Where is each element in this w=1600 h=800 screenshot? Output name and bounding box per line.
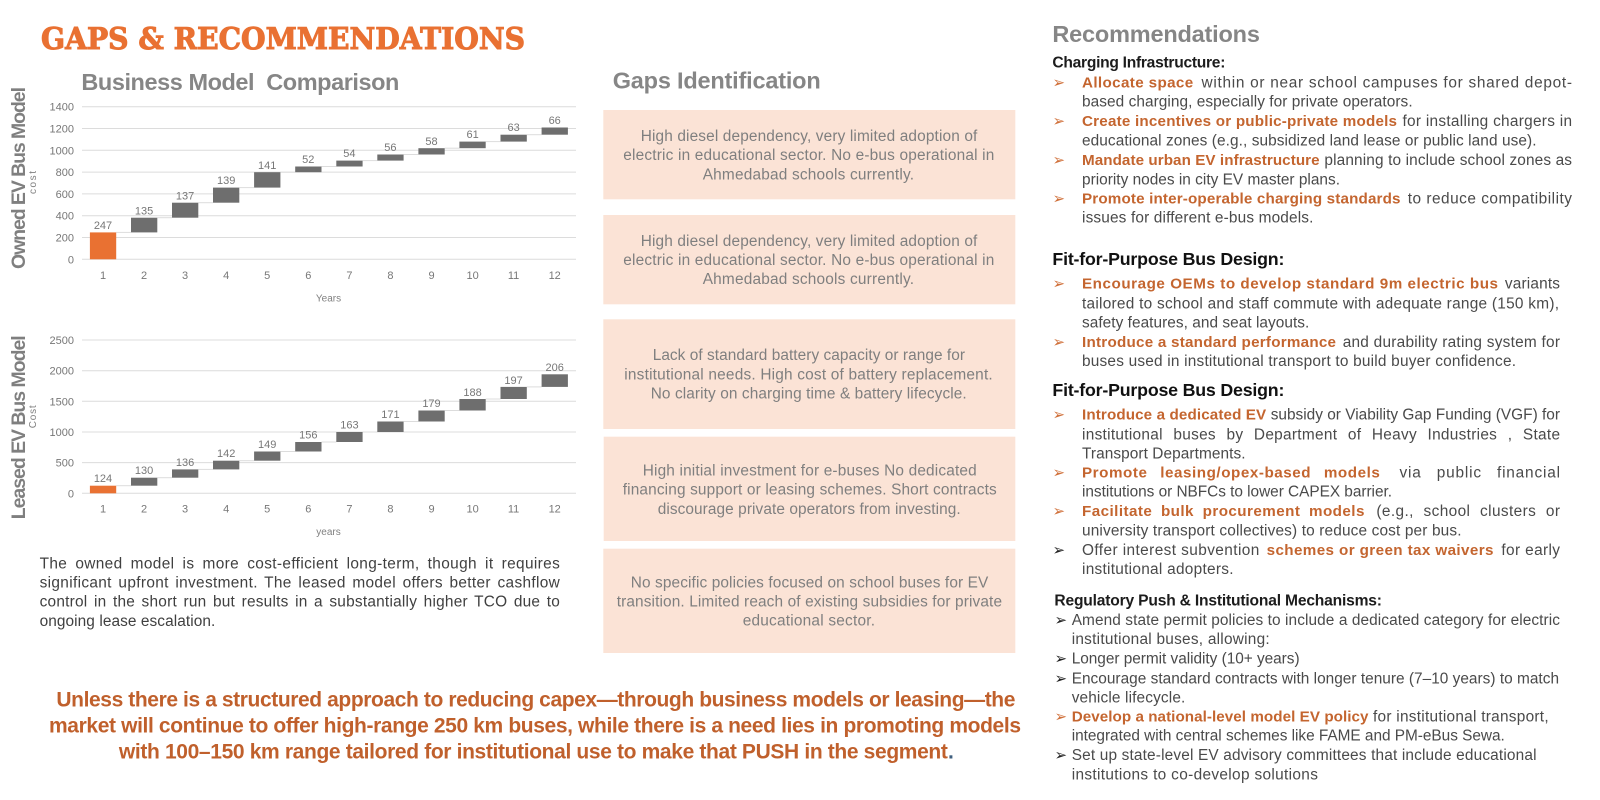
list: financing bullets: Introduce a dedicated EV bbox=[1082, 406, 1267, 423]
text block: model comparison summary: significant upfront investment. The leased model offers better cashflow bbox=[40, 575, 561, 592]
category labels: 7 bbox=[346, 270, 352, 282]
category labels: 12 bbox=[549, 270, 561, 282]
callout: conclusion: Unless there is a structured approach to reducing capex—through business models or leasing—the bbox=[56, 689, 1015, 712]
section: charging infrastructure bbox=[1052, 55, 1572, 227]
list: bus design bullets: variants bbox=[1505, 275, 1560, 292]
y axis ticks: 600 bbox=[56, 189, 74, 201]
list: financing bullets: ➢ bbox=[1052, 541, 1065, 559]
category labels: 2 bbox=[141, 504, 147, 516]
list: financing bullets: university transport collectives) to reduce cost per bus. bbox=[1082, 523, 1462, 540]
x axis title: years bbox=[316, 527, 341, 538]
panel: gap 5: No specific policies focused on school buses for EV bbox=[631, 574, 989, 591]
callout: conclusion: market will continue to offer high-range 250 km buses, while there is a need lies in promoting models bbox=[49, 715, 1021, 738]
list: financing bullets: institutional adopters. bbox=[1082, 561, 1234, 578]
text block: model comparison summary: control in the short run but results in a substantially higher TCO due to bbox=[40, 594, 560, 611]
panel: gap 5: educational sector. bbox=[743, 613, 875, 630]
list: financing bullets: schemes or green tax waivers bbox=[1267, 542, 1494, 559]
panel: gap 4: High initial investment for e-buses No dedicated bbox=[643, 462, 977, 479]
list: financing bullets: Transport Departments. bbox=[1082, 445, 1246, 462]
data labels bbox=[94, 115, 561, 232]
x axis title: Years bbox=[316, 294, 341, 305]
y axis subtitle: cost: Cost bbox=[28, 405, 39, 428]
list: financing bullets: (e.g., school clusters or bbox=[1376, 503, 1560, 520]
list: bus design bullets: ➢ bbox=[1052, 333, 1065, 351]
list: financing bullets: Facilitate bulk procurement models bbox=[1082, 503, 1364, 520]
category labels: 6 bbox=[305, 270, 311, 282]
list: financing bullets: Offer interest subvention bbox=[1082, 542, 1259, 559]
text block: model comparison summary bbox=[40, 555, 561, 630]
list: charging bullets: ➢ bbox=[1052, 74, 1065, 92]
bars bbox=[90, 128, 568, 259]
data labels: 171 bbox=[381, 409, 400, 421]
data labels: 137 bbox=[176, 190, 194, 202]
y axis title: owned: Owned EV Bus Model bbox=[8, 87, 30, 269]
list: charging bullets: planning to include school zones as bbox=[1324, 152, 1572, 169]
section: fit-for-purpose bus design bbox=[1052, 249, 1560, 370]
category labels: 1 bbox=[100, 270, 106, 282]
data labels: 56 bbox=[384, 142, 397, 154]
list: bus design bullets bbox=[1052, 274, 1560, 370]
list: regulatory bullets: Set up state-level EV advisory committees that include educational bbox=[1072, 747, 1536, 764]
panel: gap 1 bbox=[603, 110, 1015, 199]
data labels: 54 bbox=[343, 148, 356, 160]
list: charging bullets: Create incentives or public-private models bbox=[1082, 113, 1397, 130]
list: charging bullets: based charging, especially for private operators. bbox=[1082, 94, 1413, 111]
list: bus design bullets: ➢ bbox=[1052, 274, 1065, 292]
list: financing bullets: institutional buses by Department of Heavy Industries , State bbox=[1082, 426, 1560, 443]
y axis ticks: 2500 bbox=[50, 335, 74, 347]
category labels: 3 bbox=[182, 270, 188, 282]
subheading: bus design: Fit-for-Purpose Bus Design: bbox=[1052, 249, 1284, 269]
category labels: 9 bbox=[428, 504, 435, 516]
data labels: 135 bbox=[135, 205, 153, 217]
list: regulatory bullets bbox=[1054, 611, 1560, 783]
panel: gap 3 bbox=[603, 319, 1015, 429]
y axis ticks: 1000 bbox=[50, 427, 74, 439]
panel: gap 2 bbox=[603, 215, 1015, 304]
list: regulatory bullets: for institutional transport, bbox=[1373, 709, 1549, 726]
section: regulatory push and institutional mechanisms bbox=[1054, 592, 1560, 783]
category labels: 4 bbox=[223, 270, 229, 282]
bars bbox=[90, 374, 568, 493]
data labels: 179 bbox=[422, 398, 441, 410]
y axis ticks: 0 bbox=[68, 254, 74, 266]
data labels: 247 bbox=[94, 220, 112, 232]
data labels: 61 bbox=[466, 129, 479, 141]
list: financing bullets: ➢ bbox=[1052, 405, 1065, 423]
category labels: 12 bbox=[549, 504, 561, 516]
panel: gap 5: transition. Limited reach of existing subsidies for private bbox=[617, 594, 1002, 611]
category labels: 7 bbox=[346, 504, 352, 516]
y axis ticks: 0 bbox=[68, 488, 74, 500]
list: charging bullets: ➢ bbox=[1052, 151, 1065, 169]
list: charging bullets: for installing chargers in bbox=[1402, 113, 1572, 130]
text block: model comparison summary: The owned model is more cost-efficient long-term, though it requires bbox=[40, 555, 560, 572]
panel: gap 1: High diesel dependency, very limited adoption of bbox=[641, 128, 978, 145]
data labels: 156 bbox=[299, 430, 317, 442]
list: charging bullets bbox=[1052, 74, 1572, 227]
category labels: 1 bbox=[100, 504, 106, 516]
panel: gap 1: electric in educational sector. No e-bus operational in bbox=[623, 147, 994, 164]
y axis title: leased: Leased EV Bus Model bbox=[8, 335, 30, 519]
category labels: 4 bbox=[223, 504, 229, 516]
data labels: 63 bbox=[507, 122, 520, 134]
y axis subtitle: cost: cost bbox=[28, 171, 39, 194]
y axis ticks bbox=[50, 335, 74, 500]
data labels: 188 bbox=[463, 387, 482, 399]
category labels: 9 bbox=[428, 270, 435, 282]
category labels: 8 bbox=[387, 270, 393, 282]
panel: gap 4 bbox=[604, 437, 1015, 541]
list: financing bullets: Promote leasing/opex-based models bbox=[1082, 464, 1380, 481]
y axis ticks: 1500 bbox=[50, 396, 74, 408]
list: financing bullets: ➢ bbox=[1052, 502, 1065, 520]
list: charging bullets: Promote inter-operable charging standards bbox=[1082, 191, 1400, 208]
list: regulatory bullets: Longer permit validity (10+ years) bbox=[1072, 650, 1300, 667]
list: financing bullets: ➢ bbox=[1052, 463, 1065, 481]
y axis ticks: 1200 bbox=[50, 124, 74, 136]
category labels: 6 bbox=[305, 504, 311, 516]
list: bus design bullets: tailored to school and staff commute with adequate range (150 km), bbox=[1082, 295, 1559, 312]
panel: gap 2: Ahmedabad schools currently. bbox=[703, 271, 914, 288]
list: charging bullets: priority nodes in city EV master plans. bbox=[1082, 171, 1340, 188]
data labels: 139 bbox=[217, 175, 235, 187]
category labels: 5 bbox=[264, 504, 270, 516]
list: regulatory bullets: institutions to co-develop solutions bbox=[1072, 766, 1318, 783]
category labels: 11 bbox=[508, 270, 519, 282]
category labels bbox=[100, 504, 561, 516]
y axis ticks: 200 bbox=[56, 232, 74, 244]
y axis ticks: 800 bbox=[56, 167, 74, 179]
list: regulatory bullets: Develop a national-level model EV policy bbox=[1072, 709, 1369, 726]
category labels: 3 bbox=[182, 504, 188, 516]
list: charging bullets: to reduce compatibility bbox=[1408, 191, 1572, 208]
data labels: 206 bbox=[546, 362, 564, 374]
list: financing bullets: subsidy or Viability Gap Funding (VGF) for bbox=[1271, 406, 1560, 423]
data labels: 197 bbox=[504, 375, 523, 387]
category labels bbox=[100, 270, 561, 282]
list: regulatory bullets: ➢ bbox=[1054, 708, 1067, 726]
data labels: 136 bbox=[176, 457, 194, 469]
panel: gap 4: discourage private operators from investing. bbox=[658, 501, 961, 518]
y axis ticks: 2000 bbox=[50, 366, 74, 378]
y axis ticks: 1000 bbox=[50, 145, 74, 157]
section: financing recommendations bbox=[1052, 380, 1560, 578]
callout: conclusion bbox=[49, 689, 1021, 763]
list: charging bullets: ➢ bbox=[1052, 190, 1065, 208]
y axis ticks: 400 bbox=[56, 211, 74, 223]
list: regulatory bullets: Amend state permit policies to include a dedicated category for electric bbox=[1072, 612, 1560, 629]
data labels: 141 bbox=[258, 160, 276, 172]
list: financing bullets bbox=[1052, 405, 1560, 578]
chart: owned EV bus model waterfall bbox=[8, 87, 576, 305]
list: charging bullets: issues for different e-bus models. bbox=[1082, 210, 1313, 227]
data labels: 52 bbox=[302, 154, 314, 166]
panel: gap 1: Ahmedabad schools currently. bbox=[703, 166, 914, 183]
list: bus design bullets: Encourage OEMs to develop standard 9m electric bus bbox=[1082, 275, 1498, 292]
category labels: 11 bbox=[508, 504, 519, 516]
chart: leased EV bus model waterfall bbox=[8, 335, 576, 538]
panel: gap 3: Lack of standard battery capacity or range for bbox=[653, 347, 965, 364]
panel: gap 2: High diesel dependency, very limited adoption of bbox=[641, 233, 978, 250]
data labels: 124 bbox=[94, 473, 112, 485]
subheading: charging infrastructure: Charging Infrastructure: bbox=[1052, 55, 1225, 72]
panel: gap 5 bbox=[603, 549, 1015, 653]
category labels: 8 bbox=[387, 504, 393, 516]
list: charging bullets: Allocate space bbox=[1082, 75, 1193, 92]
panel: gap 3: institutional needs. High cost of battery replacement. bbox=[624, 366, 993, 383]
list: bus design bullets: and durability rating system for bbox=[1343, 334, 1560, 351]
category labels: 10 bbox=[466, 270, 479, 282]
list: regulatory bullets: institutional buses, allowing: bbox=[1072, 631, 1270, 648]
list: bus design bullets: Introduce a standard performance bbox=[1082, 334, 1336, 351]
panel: gap 2: electric in educational sector. No e-bus operational in bbox=[623, 252, 994, 269]
data labels: 163 bbox=[340, 420, 359, 432]
list: regulatory bullets: ➢ bbox=[1054, 746, 1067, 764]
list: regulatory bullets: ➢ bbox=[1054, 611, 1067, 629]
heading: gaps identification: Gaps Identification bbox=[613, 67, 821, 93]
subheading: second bus design heading: Fit-for-Purpose Bus Design: bbox=[1052, 380, 1284, 400]
heading: recommendations: Recommendations bbox=[1052, 21, 1260, 47]
list: regulatory bullets: vehicle lifecycle. bbox=[1072, 689, 1185, 706]
callout: conclusion: . bbox=[948, 740, 954, 763]
list: financing bullets: for early bbox=[1501, 542, 1560, 559]
panel: gap 4: financing support or leasing schemes. Short contracts bbox=[623, 482, 997, 499]
data labels: 142 bbox=[217, 448, 235, 460]
list: financing bullets: institutions or NBFCs to lower CAPEX barrier. bbox=[1082, 484, 1392, 501]
callout: conclusion: with 100–150 km range tailored for institutional use to make that PUSH in the segment bbox=[118, 740, 948, 763]
data labels: 58 bbox=[425, 136, 438, 148]
list: financing bullets: via public financial bbox=[1400, 464, 1560, 481]
y axis ticks bbox=[50, 102, 74, 266]
category labels: 10 bbox=[466, 504, 479, 516]
list: regulatory bullets: integrated with central schemes like FAME and PM-eBus Sewa. bbox=[1072, 728, 1505, 745]
data labels: 130 bbox=[135, 465, 153, 477]
data labels: 149 bbox=[258, 439, 276, 451]
list: charging bullets: ➢ bbox=[1052, 112, 1065, 130]
y axis ticks: 500 bbox=[56, 458, 74, 470]
subheading: regulatory: Regulatory Push & Institutional Mechanisms: bbox=[1054, 592, 1382, 609]
category labels: 5 bbox=[264, 270, 270, 282]
data labels: 66 bbox=[549, 115, 561, 127]
title: GAPS & RECOMMENDATIONS bbox=[41, 21, 525, 56]
list: bus design bullets: buses used in institutional transport to build buyer confidence. bbox=[1082, 353, 1516, 370]
list: bus design bullets: safety features, and seat layouts. bbox=[1082, 315, 1309, 332]
panel: gap 3: No clarity on charging time & battery lifecycle. bbox=[651, 386, 967, 403]
category labels: 2 bbox=[141, 270, 147, 282]
list: charging bullets: Mandate urban EV infrastructure bbox=[1082, 152, 1320, 169]
heading: business model comparison: Business Model Comparison bbox=[81, 69, 399, 95]
list: charging bullets: within or near school campuses for shared depot- bbox=[1200, 75, 1572, 92]
list: regulatory bullets: ➢ bbox=[1054, 649, 1067, 667]
list: regulatory bullets: ➢ bbox=[1054, 669, 1067, 687]
text block: model comparison summary: ongoing lease escalation. bbox=[40, 613, 215, 630]
data labels bbox=[94, 362, 564, 485]
y axis ticks: 1400 bbox=[50, 102, 74, 114]
list: regulatory bullets: Encourage standard contracts with longer tenure (7–10 years) to match bbox=[1072, 670, 1559, 687]
list: charging bullets: educational zones (e.g., subsidized land lease or public land use). bbox=[1082, 133, 1536, 150]
